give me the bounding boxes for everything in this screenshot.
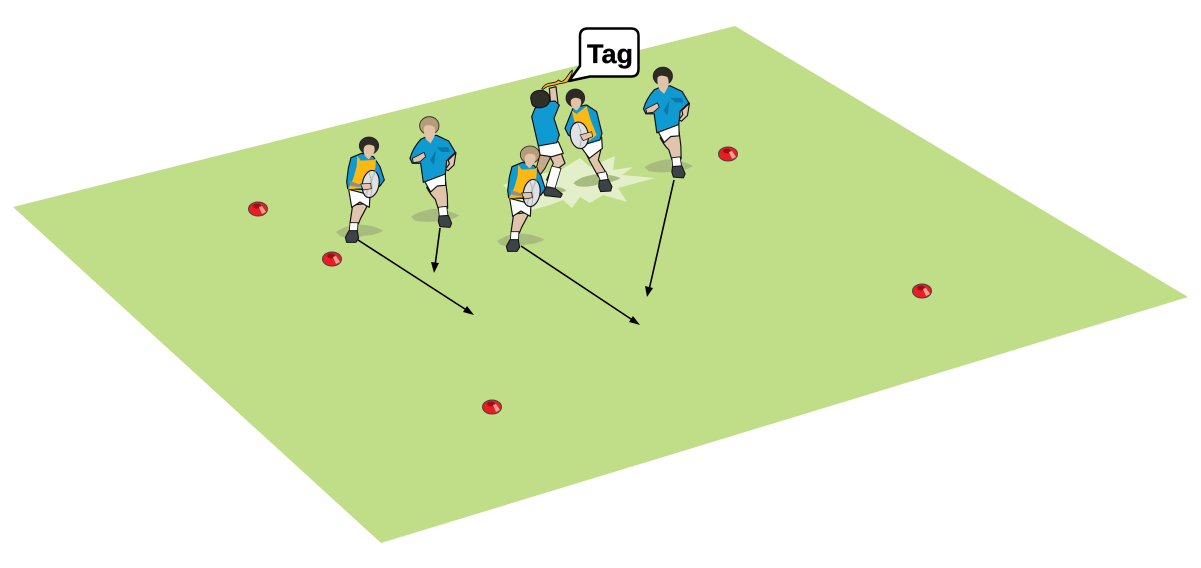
- arrow: right player run: [645, 180, 674, 297]
- arrow: carrier run: [358, 240, 474, 315]
- starburst: tag impact: [503, 156, 655, 210]
- player: ball carrier left: [336, 137, 384, 242]
- player: tagged carrier: [565, 89, 621, 192]
- arrow: support run: [431, 228, 440, 273]
- callout: Tag: Tag: [587, 39, 633, 69]
- cones: [248, 147, 932, 414]
- player: right runner: [643, 67, 693, 178]
- callout: Tag: [569, 28, 638, 81]
- player: support runner blond: [410, 117, 459, 227]
- player: second ball carrier blond: [497, 146, 545, 251]
- arrow: second carrier run: [521, 246, 640, 325]
- player: tagger reaching up: [531, 70, 572, 197]
